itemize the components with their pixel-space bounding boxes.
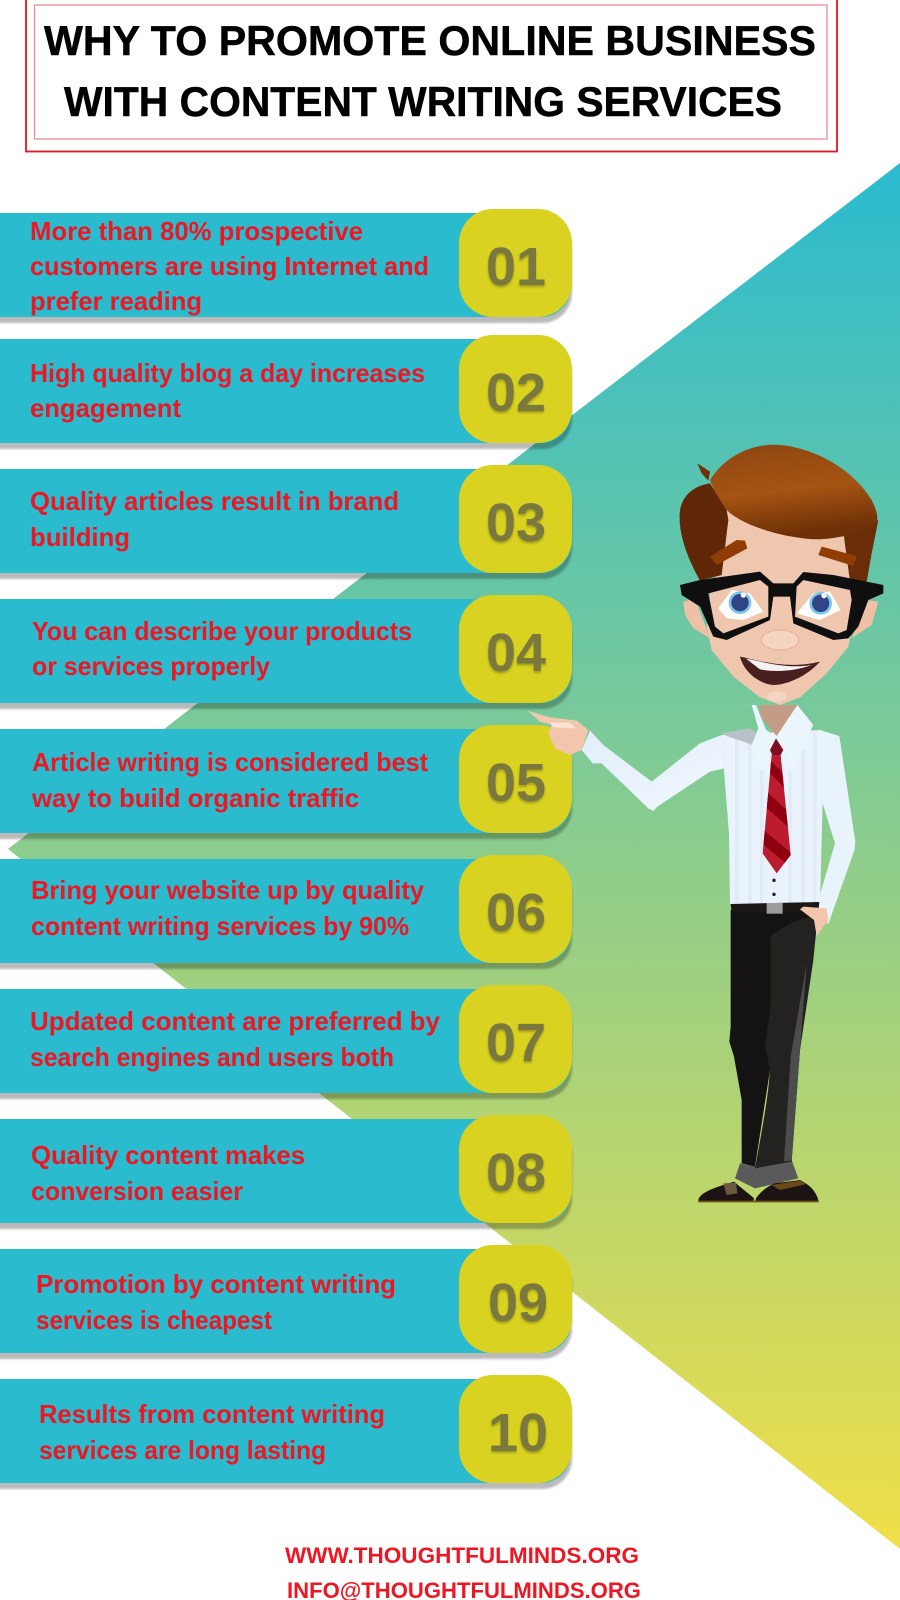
row 08: Quality content makes <box>31 1140 305 1170</box>
row 04: 04 <box>486 623 546 683</box>
nose <box>761 630 799 650</box>
title: WITH CONTENT WRITING SERVICES <box>64 78 782 125</box>
row 03: Quality articles result in brand <box>30 486 399 516</box>
title <box>44 17 816 125</box>
row 09 <box>0 1245 572 1359</box>
row 05: Article writing is considered best <box>32 747 428 777</box>
row 06 <box>0 855 572 969</box>
glasses <box>680 572 883 640</box>
row 06: 06 <box>486 883 546 943</box>
row 06: Bring your website up by quality <box>31 875 425 905</box>
row 03 <box>0 465 572 579</box>
row 10: 10 <box>488 1403 548 1463</box>
row 01: 01 <box>486 237 546 297</box>
row 08: conversion easier <box>31 1176 243 1206</box>
title: WHY TO PROMOTE ONLINE BUSINESS <box>44 17 816 64</box>
row 05: 05 <box>486 753 546 813</box>
row 03: 03 <box>486 493 546 553</box>
row 06: content writing services by 90% <box>31 911 409 941</box>
footer contact: WWW.THOUGHTFULMINDS.ORG <box>285 1543 639 1568</box>
row 07: 07 <box>486 1013 546 1073</box>
row 01 <box>0 209 572 323</box>
row 09: services is cheapest <box>36 1305 272 1335</box>
row 10 <box>0 1375 572 1489</box>
footer contact <box>285 1543 641 1600</box>
row 07: Updated content are preferred by <box>30 1006 441 1036</box>
row 10: services are long lasting <box>39 1435 326 1465</box>
eyes <box>718 590 763 620</box>
row 02 <box>0 335 572 449</box>
row 04: or services properly <box>32 651 271 681</box>
legs and shoes <box>698 910 819 1202</box>
row 02: engagement <box>30 393 181 423</box>
row 01: More than 80% prospective <box>30 216 363 246</box>
row 08: 08 <box>486 1143 546 1203</box>
row 07 <box>0 985 572 1099</box>
head <box>680 445 883 705</box>
row 09: Promotion by content writing <box>36 1269 396 1299</box>
title box <box>26 0 837 152</box>
row 09: 09 <box>488 1273 548 1333</box>
row 05: way to build organic traffic <box>31 783 359 813</box>
row 04: You can describe your products <box>32 616 412 646</box>
row 10: Results from content writing <box>39 1399 385 1429</box>
row 02: 02 <box>486 363 546 423</box>
row 01: customers are using Internet and <box>30 251 429 281</box>
mouth <box>740 657 820 685</box>
row 01: prefer reading <box>30 286 202 316</box>
row 05 <box>0 725 572 839</box>
character: cartoon man pointing <box>527 445 883 1202</box>
row 04 <box>0 595 572 709</box>
row 07: search engines and users both <box>30 1042 394 1072</box>
row 03: building <box>30 522 130 552</box>
torso, arms and tie <box>527 705 855 936</box>
row 02: High quality blog a day increases <box>30 358 425 388</box>
row 08 <box>0 1115 572 1229</box>
